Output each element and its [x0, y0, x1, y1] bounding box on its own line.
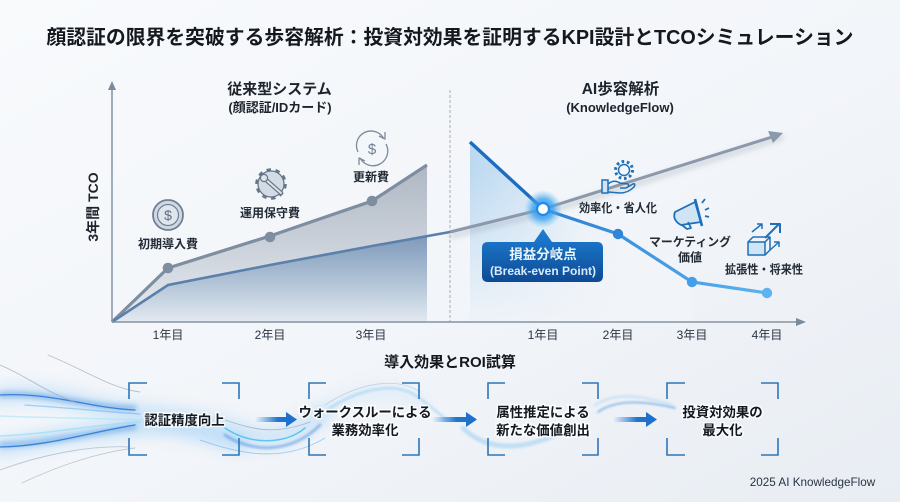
step 3	[488, 383, 598, 455]
heading: AI gait analysis	[566, 79, 674, 115]
text step 1: 認証精度向上	[144, 412, 225, 428]
divider	[449, 90, 451, 322]
icon: cube with arrows	[748, 224, 780, 255]
icon: gear and wrench	[256, 170, 286, 198]
axes	[108, 81, 806, 326]
flow ribbons	[0, 355, 675, 483]
arrow 1	[255, 412, 297, 427]
label: efficiency: 効率化・省人化	[579, 200, 657, 215]
year labels left: 1年目	[153, 328, 183, 342]
heading: traditional system: 従来型システム	[227, 81, 332, 98]
line: AI benefit	[470, 142, 772, 298]
year labels right: 1年目	[528, 328, 558, 342]
icon: coin: $	[164, 207, 172, 223]
label: maintenance cost: 運用保守費	[240, 205, 300, 220]
line: traditional cost	[112, 165, 427, 322]
icon: megaphone	[674, 199, 709, 229]
label: scalability: 拡張性・将来性	[725, 262, 803, 276]
line shadow: cost trend	[450, 137, 783, 236]
step 1	[129, 383, 239, 455]
text step 4: 投資対効果の	[682, 404, 763, 420]
text step 2: ウォークスルーによる	[298, 405, 432, 420]
year labels right: 4年目	[752, 328, 782, 342]
heading: AI gait analysis: AI歩容解析	[582, 79, 660, 98]
text step 4: 最大化	[702, 422, 743, 438]
brackets step 2	[309, 383, 419, 455]
year labels left	[153, 328, 386, 342]
step 2	[298, 383, 432, 455]
panel: traditional system chart	[112, 81, 427, 342]
title: 顔認証の限界を突破する歩容解析：投資対効果を証明するKPI設計とTCOシミュレーション	[46, 26, 854, 49]
arrow 2	[432, 412, 477, 427]
year labels left: 3年目	[356, 328, 386, 342]
text step 3: 属性推定による	[496, 404, 590, 420]
year labels right	[528, 328, 782, 342]
year labels right: 2年目	[603, 328, 633, 342]
text step 3: 新たな価値創出	[496, 423, 590, 438]
label: initial cost: 初期導入費	[138, 236, 198, 251]
label: renewal cost: 更新費	[353, 169, 389, 184]
heading: ROI: 導入効果とROI試算	[384, 353, 516, 371]
area: AI savings	[470, 142, 692, 322]
footer credit: 2025 AI KnowledgeFlow	[750, 476, 876, 489]
icon: coin	[153, 200, 183, 230]
gray area: traditional cost	[112, 165, 427, 322]
label: marketing value	[649, 234, 731, 264]
icon: renewal coin	[356, 131, 388, 166]
marker: break-even glow	[524, 190, 562, 228]
icon: renewal coin: $	[368, 141, 377, 158]
arrow: cost trend line	[112, 131, 783, 322]
blue area: AI cost	[112, 235, 427, 322]
year labels right: 3年目	[677, 328, 707, 342]
callout: break-even point: (Break-even Point)	[490, 264, 596, 278]
arrow 3	[613, 412, 657, 427]
label: marketing value: マーケティング	[649, 234, 731, 249]
icon: gear and hand	[602, 162, 635, 193]
heading: traditional system: (顔認証/IDカード)	[228, 100, 332, 115]
heading: AI gait analysis: (KnowledgeFlow)	[566, 100, 674, 115]
text step 4	[682, 404, 763, 438]
y axis label: 3年間 TCO	[85, 172, 101, 242]
text step 2	[298, 405, 432, 438]
brackets step 4	[667, 383, 778, 455]
label: marketing value: 価値	[678, 250, 702, 264]
panel: AI gait analysis chart	[112, 79, 803, 342]
callout: break-even point: 損益分岐点	[509, 246, 577, 262]
callout: break-even point	[482, 229, 603, 282]
text step 2: 業務効率化	[332, 422, 399, 438]
year labels left: 2年目	[255, 328, 285, 342]
step 4	[667, 383, 778, 455]
brackets step 3	[488, 383, 598, 455]
text step 3	[496, 404, 590, 438]
heading: traditional system	[227, 81, 332, 115]
brackets step 1	[129, 383, 239, 455]
